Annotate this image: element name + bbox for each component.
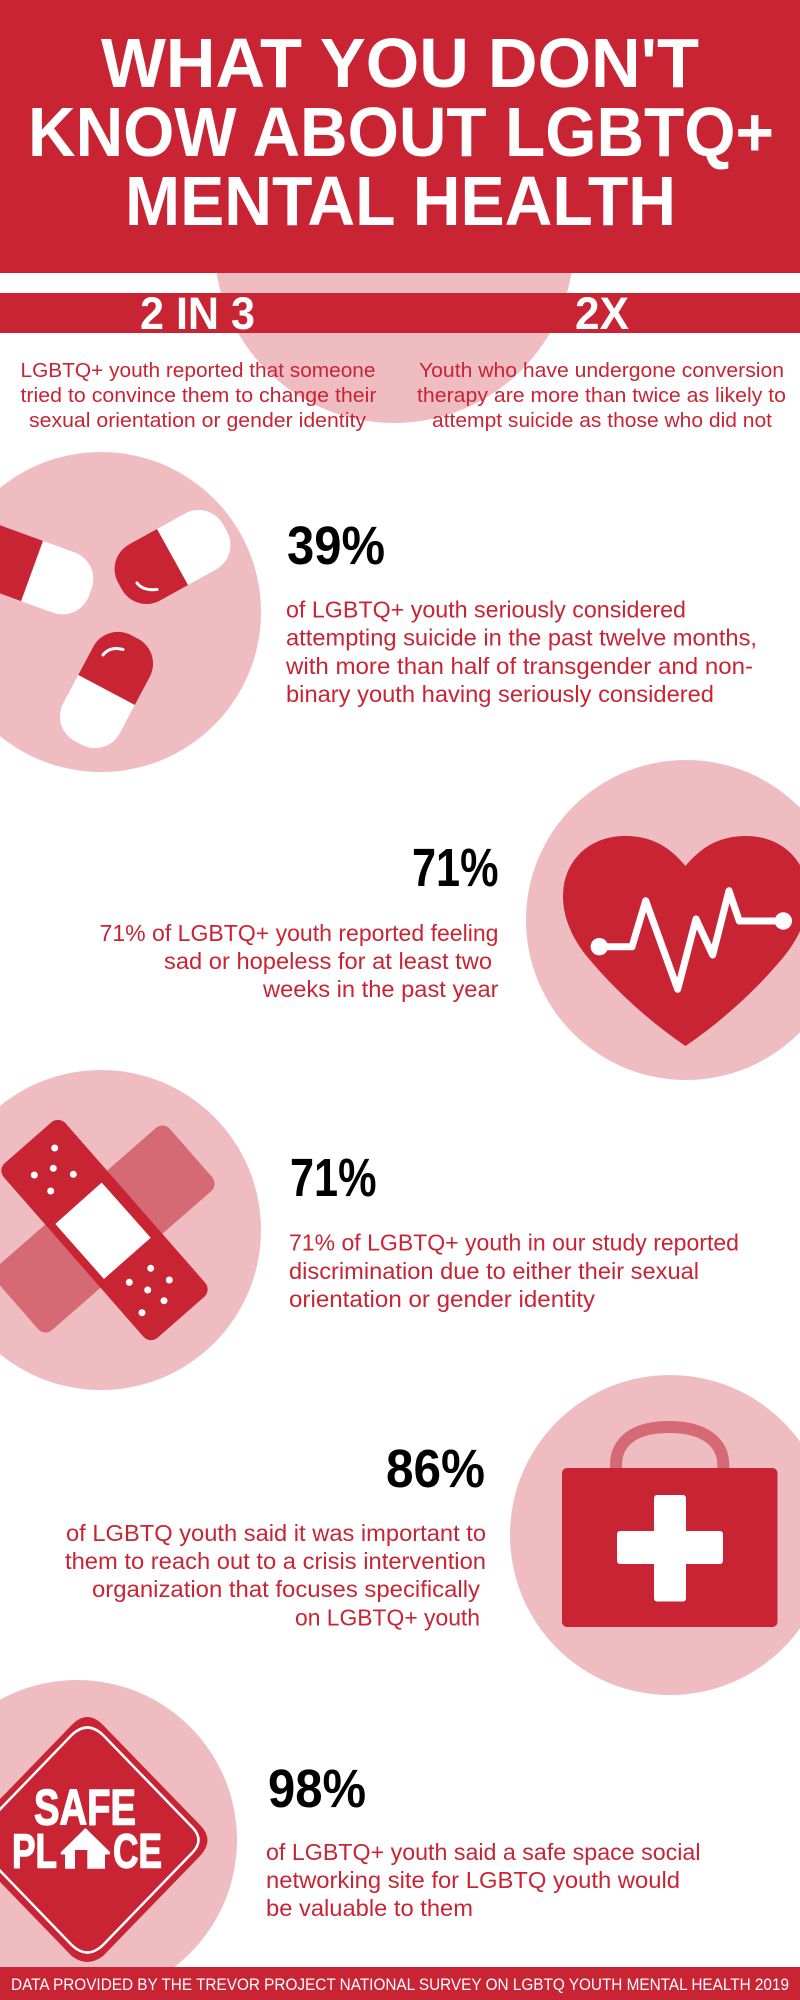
text block: 98% description <box>266 1839 700 1921</box>
text block: 2 in 3 description: sexual orientation or gender identity <box>29 410 366 432</box>
text block: 2x description: Youth who have undergone conversion <box>419 360 784 382</box>
text block: 86% description: on LGBTQ+ youth <box>295 1604 480 1630</box>
text block: discrimination description: discrimination due to either their sexual <box>289 1258 699 1284</box>
icon: heart with pulse <box>526 760 800 1080</box>
text block: 2x description: attempt suicide as those who did not <box>432 410 772 432</box>
text block: 2x description <box>417 360 786 432</box>
panel: 39 percent <box>0 452 757 772</box>
text block: 71% sad description: sad or hopeless for at least two <box>164 948 492 974</box>
statistic: 71%: 71% <box>290 1148 376 1208</box>
text block: discrimination description: orientation or gender identity <box>289 1286 595 1312</box>
text block: 71% sad description: weeks in the past year <box>262 976 499 1002</box>
text block: discrimination description: 71% of LGBTQ+ youth in our study reported <box>289 1230 739 1256</box>
header panel <box>0 0 800 273</box>
icon: pills <box>0 452 261 772</box>
icon: safe place sign: CE <box>113 1824 162 1878</box>
text block: 39% description: attempting suicide in the past twelve months, <box>286 624 757 650</box>
band heading: 2 in 3: 2 IN 3 <box>140 288 255 339</box>
icon: first aid kit <box>510 1375 800 1695</box>
text block: 2 in 3 description <box>20 360 377 432</box>
panel: 98 percent <box>0 1680 700 2000</box>
text block: 71% sad description: 71% of LGBTQ+ youth reported feeling <box>100 920 498 946</box>
text block: 98% description: be valuable to them <box>266 1895 473 1921</box>
text block: 86% description: them to reach out to a crisis intervention <box>65 1548 486 1574</box>
icon: safe place sign <box>0 1680 237 2000</box>
icon: safe place sign: SAFE <box>34 1780 136 1836</box>
panel: 71 percent sad <box>100 760 800 1080</box>
text block: 86% description: of LGBTQ youth said it was important to <box>66 1520 486 1546</box>
text block: 39% description: with more than half of transgender and non- <box>285 653 753 679</box>
text block: 86% description <box>65 1520 486 1630</box>
text block: 86% description: organization that focuses specifically <box>92 1576 480 1602</box>
panel: 71 percent discrimination <box>0 1070 739 1390</box>
footer <box>0 1967 800 2000</box>
stat band <box>0 288 800 339</box>
title <box>28 24 774 240</box>
statistic: 98%: 98% <box>268 1759 366 1819</box>
text block: 2 in 3 description: LGBTQ+ youth reported that someone <box>20 360 376 382</box>
text block: 39% description: binary youth having seriously considered <box>286 681 714 707</box>
text block: 98% description: networking site for LGBTQ youth would <box>266 1867 680 1893</box>
title: WHAT YOU DON'T <box>101 24 699 102</box>
icon: safe place sign: PL <box>12 1824 57 1878</box>
title: MENTAL HEALTH <box>125 162 676 240</box>
band heading: 2x: 2X <box>575 288 629 339</box>
icon: crossed bandages <box>0 1070 261 1390</box>
statistic: 71%: 71% <box>412 838 498 898</box>
text block: 39% description <box>285 596 757 707</box>
text block: 71% sad description <box>100 920 499 1002</box>
text block: 2x description: therapy are more than twice as likely to <box>417 385 786 407</box>
text block: discrimination description <box>289 1230 739 1312</box>
background circle: top stats <box>214 63 574 423</box>
panel: 86 percent <box>65 1375 800 1695</box>
statistic: 86%: 86% <box>386 1439 485 1499</box>
text block: 2 in 3 description: tried to convince them to change their <box>20 385 377 407</box>
text block: 98% description: of LGBTQ+ youth said a safe space social <box>266 1839 700 1865</box>
title: KNOW ABOUT LGBTQ+ <box>28 93 774 171</box>
statistic: 39%: 39% <box>287 516 385 576</box>
text block: 39% description: of LGBTQ+ youth seriously considered <box>286 596 686 622</box>
